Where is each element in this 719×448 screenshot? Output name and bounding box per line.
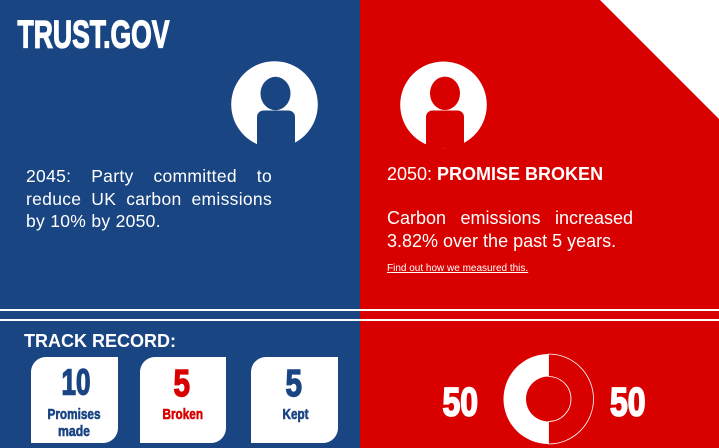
heading: track record: TRACK RECORD:	[24, 331, 176, 351]
icon: politician avatar red	[400, 62, 487, 148]
donut right half	[548, 354, 594, 444]
card: kept	[251, 357, 338, 443]
value: right 50: 50	[610, 380, 646, 424]
pledge text: 2045: Party committed to reduce UK carbon emissions by 10% by 2050.	[26, 166, 272, 231]
link: methodology: Find out how we measured this.	[387, 263, 528, 274]
title: TRUST.GOV	[18, 14, 170, 56]
corner triangle	[600, 0, 719, 119]
outcome text: Carbon emissions increased 3.82% over the past 5 years.	[387, 208, 633, 250]
panel: promise outcome	[360, 0, 719, 448]
stat: 5 broken	[162, 363, 203, 423]
stat: 5 broken: 5	[174, 363, 190, 405]
card: broken	[140, 357, 226, 443]
stat: 10: Promises	[48, 406, 100, 423]
stat: 10: 10	[62, 362, 90, 402]
stat: 5 kept	[282, 363, 309, 423]
stat: 5 kept: Kept	[282, 406, 308, 423]
value: left 50: 50	[442, 380, 478, 424]
donut left half	[504, 354, 548, 444]
stat: 10: made	[58, 423, 90, 440]
icon: politician avatar blue	[231, 61, 318, 144]
stat: 5 broken: Broken	[162, 406, 203, 423]
stat: 5 kept: 5	[286, 363, 302, 405]
card: promises made	[31, 357, 118, 443]
stat: 10	[48, 362, 100, 440]
verdict heading: 2050: PROMISE BROKEN	[387, 164, 603, 184]
panel: party pledge	[0, 0, 360, 448]
